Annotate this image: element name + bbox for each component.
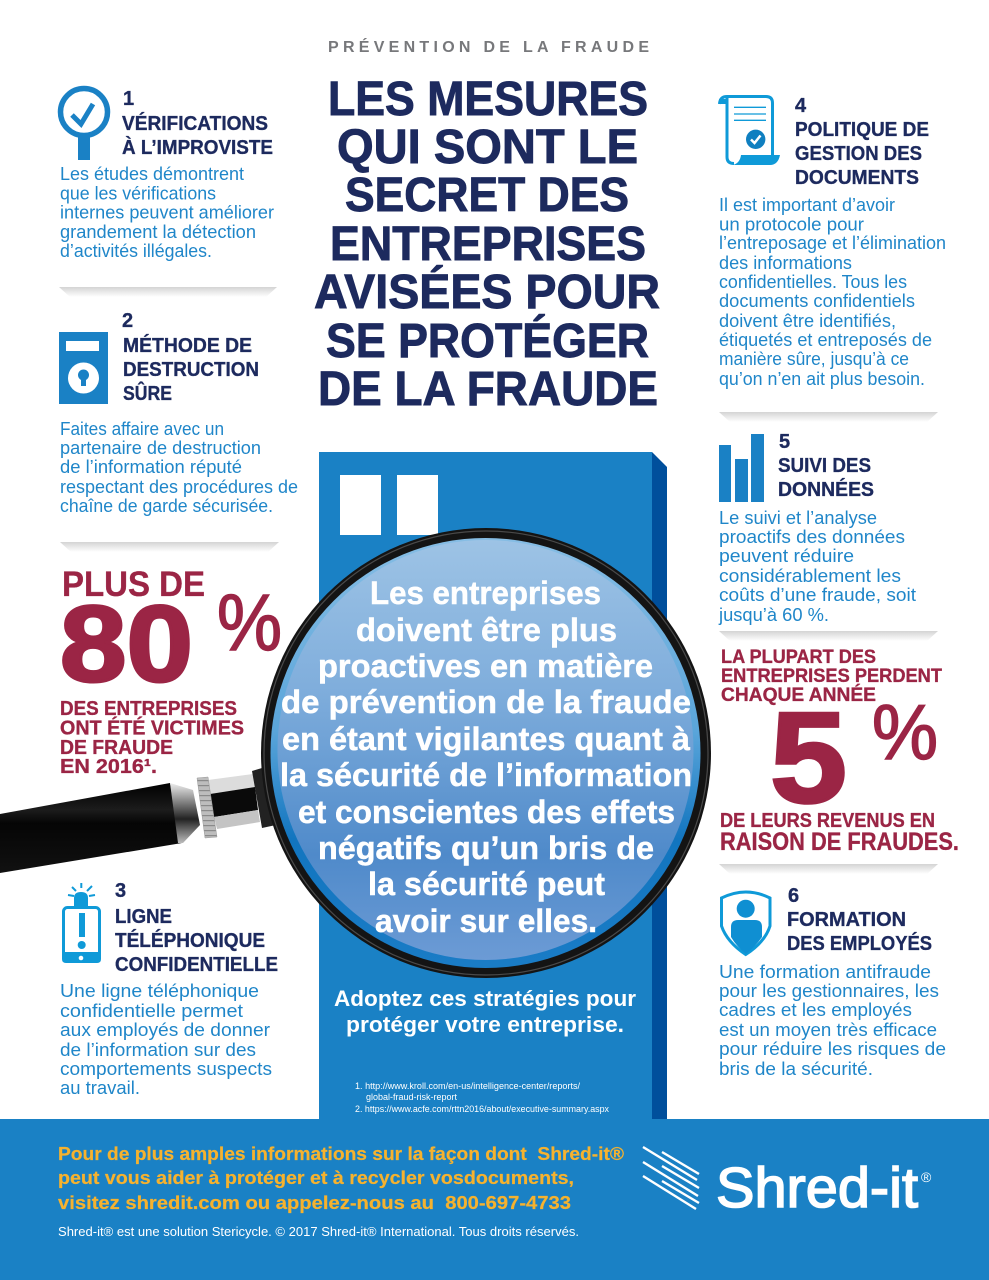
step 5 text: peuvent réduire [719, 546, 854, 566]
footer band [0, 1119, 989, 1280]
step 5 heading: DONNÉES [778, 478, 874, 501]
step 4 text: un protocole pour [719, 214, 864, 234]
step 4 text: l’entreposage et l’élimination [719, 233, 946, 253]
icon: phone with alarm beacon [62, 883, 101, 963]
title: LES MESURES [328, 73, 648, 126]
step 4 text: documents confidentiels [719, 291, 915, 311]
lens text: en étant vigilantes quant à [282, 721, 690, 757]
footnotes: 1. http://www.kroll.com/en-us/intelligence-center/reports/ [355, 1081, 581, 1091]
step 5 text: jusqu’à 60 %. [718, 605, 829, 625]
callout: 5 percent: 5 [770, 686, 847, 830]
step 2 text: respectant des procédures de [60, 477, 298, 497]
step 2 text: partenaire de destruction [60, 438, 261, 458]
step 2 heading [122, 310, 259, 405]
step 4 text: confidentielles. Tous les [719, 272, 907, 292]
footer contact text [58, 1144, 624, 1213]
step 2 heading: DESTRUCTION [123, 359, 259, 381]
icon: bar chart [719, 434, 764, 502]
title [314, 73, 660, 416]
step 2 text: Faites affaire avec un [60, 419, 224, 439]
title: SECRET DES [345, 169, 629, 222]
footer contact text: visitez shredit.com ou appelez-nous au 800-697-4733 [58, 1193, 571, 1213]
panel: step 3 [60, 880, 278, 1098]
lens text: négatifs qu’un bris de [318, 830, 654, 866]
call to action: Adoptez ces stratégies pour [334, 986, 636, 1011]
step 2 heading: SÛRE [123, 381, 172, 405]
lens text: doivent être plus [356, 612, 617, 648]
step 3 text: confidentielle permet [60, 1001, 243, 1021]
step 4 text: manière sûre, jusqu’à ce [719, 349, 909, 369]
lens text [280, 575, 692, 939]
step 1 heading: VÉRIFICATIONS [122, 112, 268, 135]
callout: 5 percent: % [872, 688, 938, 776]
step 2 text: chaîne de garde sécurisée. [60, 496, 273, 516]
step 6 heading [787, 885, 932, 955]
footer contact text: peut vous aider à protéger et à recycler vosdocuments, [58, 1168, 574, 1188]
step 4 text: qu’on n’en ait plus besoin. [719, 369, 925, 389]
step 4 text: doivent être identifiés, [719, 311, 896, 331]
footnotes: global-fraud-risk-report [366, 1092, 457, 1102]
logo: Shred-it [643, 1147, 932, 1220]
panel: step 5 [718, 431, 916, 625]
title: AVISÉES POUR [314, 265, 660, 319]
step 1 text [60, 164, 274, 261]
kicker heading: PRÉVENTION DE LA FRAUDE [328, 37, 649, 56]
step 1 heading [122, 88, 273, 159]
step 1 text: d’activités illégales. [60, 241, 212, 261]
icon: document scroll [719, 96, 780, 165]
footer contact text: Pour de plus amples informations sur la façon dont Shred-it® [58, 1144, 624, 1164]
step 4 heading: GESTION DES [795, 143, 922, 165]
step 6 text: Une formation antifraude [719, 962, 931, 982]
step 3 text: de l’information sur des [60, 1040, 256, 1060]
magnifier handle [0, 768, 276, 873]
step 5 text: coûts d’une fraude, soit [719, 585, 916, 605]
lens text: avoir sur elles. [375, 903, 597, 939]
step 3 text: au travail. [60, 1078, 140, 1098]
lens text: la sécurité peut [368, 866, 605, 902]
callout: 5 percent: RAISON DE FRAUDES. [720, 828, 959, 856]
callout: 80 percent [60, 565, 282, 778]
step 3 heading: LIGNE [115, 906, 172, 928]
callout: 5 percent: ENTREPRISES PERDENT [721, 665, 942, 687]
callout: 80 percent: % [217, 578, 282, 667]
callout: 80 percent: DE FRAUDE [60, 736, 173, 759]
step 2 text [60, 419, 298, 516]
step 3 text: aux employés de donner [60, 1020, 270, 1040]
step 3 heading: TÉLÉPHONIQUE [115, 929, 265, 952]
step 1 heading: 1 [123, 88, 134, 110]
icon: secure shred bin [59, 332, 108, 404]
step 3 text [60, 981, 272, 1098]
step 5 heading [778, 431, 874, 501]
panel: step 2 [59, 310, 298, 516]
step 6 text: pour les gestionnaires, les [719, 981, 939, 1001]
step 6 heading: DES EMPLOYÉS [787, 932, 932, 955]
footnotes [355, 1081, 609, 1114]
step 2 heading: 2 [122, 310, 133, 332]
callout: 80 percent: ONT ÉTÉ VICTIMES [60, 716, 244, 740]
step 4 heading [795, 95, 929, 189]
step 5 text: Le suivi et l’analyse [719, 508, 877, 528]
step 1 text: que les vérifications [60, 184, 216, 204]
step 5 heading: SUIVI DES [778, 455, 871, 477]
callout: 80 percent: DES ENTREPRISES [60, 697, 237, 720]
step 4 text: des informations [719, 253, 852, 273]
step 2 text: de l’information réputé [60, 457, 242, 477]
panel: step 6 [719, 885, 946, 1079]
title: ENTREPRISES [330, 218, 646, 271]
callout: 80 percent: 80 [60, 583, 193, 704]
logo: Shred-it: ® [921, 1169, 932, 1185]
step 6 text: pour réduire les risques de [719, 1039, 946, 1059]
panel: step 1 [60, 88, 274, 261]
panel: central blue column [319, 452, 667, 1119]
step 3 heading [115, 880, 278, 976]
callout: 5 percent: CHAQUE ANNÉE [721, 683, 876, 706]
icon: magnifier with check [60, 88, 108, 160]
title: SE PROTÉGER [326, 314, 649, 368]
lens text: de prévention de la fraude [281, 684, 691, 720]
step 5 text: proactifs des données [719, 527, 905, 547]
lens text: proactives en matière [318, 648, 653, 684]
callout: 80 percent: PLUS DE [62, 565, 205, 604]
step 1 text: grandement la détection [60, 222, 256, 242]
callout: 5 percent: LA PLUPART DES [721, 646, 876, 668]
step 1 heading: À L’IMPROVISTE [122, 136, 273, 159]
icon: quotation bars [340, 475, 438, 535]
step 4 text: étiquetés et entreposés de [719, 330, 932, 350]
footnotes: 2. https://www.acfe.com/rttn2016/about/executive-summary.aspx [355, 1104, 609, 1114]
icon: employee shield [722, 892, 770, 954]
step 4 heading: 4 [795, 95, 807, 117]
logo: Shred-it: Shred-it [716, 1156, 918, 1220]
lens text: Les entreprises [370, 575, 601, 611]
title: DE LA FRAUDE [318, 363, 658, 416]
lens text: la sécurité de l’information [280, 757, 692, 793]
step 4 heading: POLITIQUE DE [795, 119, 929, 141]
step 5 text [718, 508, 916, 625]
step 4 text [719, 195, 946, 389]
step 6 text: bris de la sécurité. [719, 1059, 873, 1079]
call to action [334, 986, 636, 1037]
step 3 heading: CONFIDENTIELLE [115, 954, 278, 976]
magnifier rim [261, 528, 711, 978]
callout: 5 percent [720, 646, 959, 856]
step 3 text: Une ligne téléphonique [60, 981, 259, 1001]
panel: step 4 [719, 95, 946, 389]
step 3 heading: 3 [115, 880, 126, 902]
step 4 text: Il est important d’avoir [719, 195, 895, 215]
step 1 text: internes peuvent améliorer [60, 202, 274, 222]
step 6 text: est un moyen très efficace [719, 1020, 937, 1040]
title: QUI SONT LE [337, 121, 638, 174]
step 4 heading: DOCUMENTS [795, 167, 919, 189]
step 6 heading: FORMATION [787, 909, 906, 931]
call to action: protéger votre entreprise. [346, 1012, 624, 1037]
step 6 text [719, 962, 946, 1079]
step 2 heading: MÉTHODE DE [123, 334, 252, 357]
copyright line: Shred-it® est une solution Stericycle. © 2017 Shred-it® International. Tous droits réservés. [58, 1224, 579, 1239]
step 5 heading: 5 [779, 431, 790, 453]
callout: 80 percent: EN 2016¹. [60, 755, 157, 778]
step 6 text: cadres et les employés [719, 1000, 912, 1020]
lens text: et conscientes des effets [298, 794, 675, 830]
callout: 5 percent: DE LEURS REVENUS EN [720, 809, 935, 832]
step 3 text: comportements suspects [60, 1059, 272, 1079]
step 5 text: considérablement les [719, 566, 901, 586]
step 6 heading: 6 [788, 885, 799, 907]
lens glass [278, 540, 694, 960]
step 1 text: Les études démontrent [60, 164, 244, 184]
magnifying glass [0, 528, 711, 978]
